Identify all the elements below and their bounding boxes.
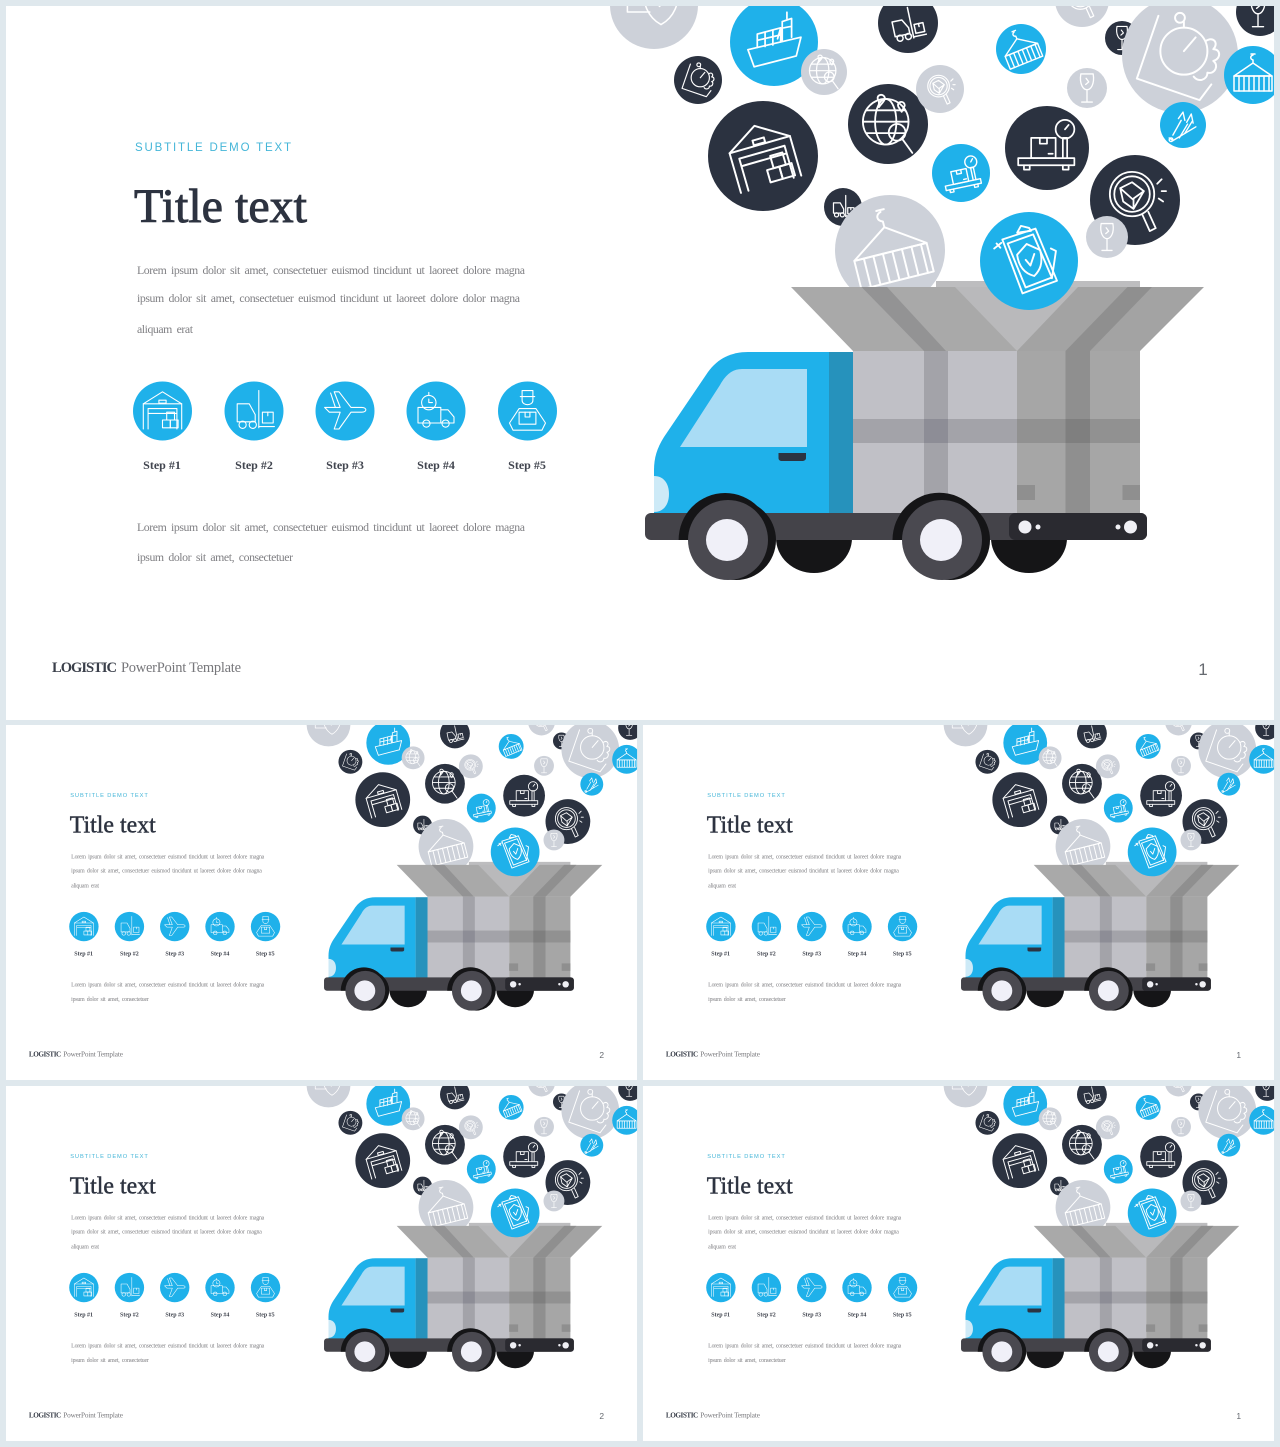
icon bubble: ship bbox=[730, 0, 818, 86]
slide 5 content: Step #4 bbox=[848, 1312, 866, 1318]
slide 2 content: Step #2 bbox=[120, 951, 139, 957]
slide 3 content: ipsum dolor sit amet, consectetuer bbox=[708, 997, 786, 1003]
slide 5 content: SUBTITLE DEMO TEXT bbox=[707, 1154, 785, 1160]
icon bubble: warehouse large bbox=[708, 101, 818, 211]
icon bubble: scale dark bbox=[1005, 106, 1089, 190]
icon bubble: container right bbox=[1224, 46, 1280, 104]
icon bubble: glass small grey bbox=[1086, 216, 1128, 258]
icon bubble: dark globe bbox=[848, 84, 928, 164]
slide 5 content: aliquam erat bbox=[708, 1245, 736, 1251]
slide 4 content: Step #3 bbox=[165, 1312, 184, 1318]
footer brand: PowerPoint Template bbox=[121, 660, 241, 676]
slide 5 content: Step #3 bbox=[802, 1312, 821, 1318]
cargo box front bbox=[853, 351, 1140, 515]
page number: 1 bbox=[1198, 660, 1208, 679]
slide 5 content: Lorem ipsum dolor sit amet, consectetuer euismod tincidunt ut laoreet dolore magna bbox=[708, 1343, 902, 1349]
slide 5 content: Step #5 bbox=[893, 1312, 912, 1318]
slide 5 content: ipsum dolor sit amet, consectetuer bbox=[708, 1358, 786, 1364]
slide 3 content: Step #5 bbox=[893, 951, 912, 957]
slide 3 content: Step #2 bbox=[757, 951, 776, 957]
icon: step 1 warehouse bbox=[133, 382, 192, 440]
slide 3 content: aliquam erat bbox=[708, 884, 736, 890]
chassis bbox=[645, 513, 1147, 540]
slide 5 content: ipsum dolor sit amet, consectetuer euismod tincidunt ut laoreet dolore dolor magna bbox=[708, 1229, 899, 1235]
slide 2 content: Lorem ipsum dolor sit amet, consectetuer euismod tincidunt ut laoreet dolore magna bbox=[71, 982, 265, 988]
slide 4 content: aliquam erat bbox=[71, 1245, 99, 1251]
slide 3 content: PowerPoint Template bbox=[700, 1050, 760, 1058]
slide 4 content: PowerPoint Template bbox=[63, 1411, 123, 1419]
slide 3 content: Lorem ipsum dolor sit amet, consectetuer euismod tincidunt ut laoreet dolore magna bbox=[708, 854, 902, 860]
slide 4 content: Step #4 bbox=[211, 1312, 229, 1318]
slide 4 content: Step #1 bbox=[74, 1312, 93, 1318]
front wheel bbox=[679, 493, 776, 580]
slide 4 content: Lorem ipsum dolor sit amet, consectetuer euismod tincidunt ut laoreet dolore magna bbox=[71, 1215, 265, 1221]
panel: slide 5 thumbnail bbox=[643, 1064, 1279, 1441]
slide 3 content bbox=[666, 703, 1279, 1060]
step labels bbox=[143, 458, 546, 472]
slide 2 content: aliquam erat bbox=[71, 884, 99, 890]
title: Title text bbox=[134, 180, 308, 233]
slide 5 content: Step #1 bbox=[711, 1312, 730, 1318]
slide 3 content: SUBTITLE DEMO TEXT bbox=[707, 793, 785, 799]
slide 5 content: 1 bbox=[1236, 1411, 1241, 1421]
step labels: Step #1 bbox=[143, 458, 181, 472]
icon: step 2 forklift bbox=[224, 382, 284, 440]
step labels: Step #3 bbox=[326, 458, 364, 472]
panel: main slide bbox=[6, 0, 1280, 720]
icon bubble: top right dark bbox=[1236, 0, 1280, 36]
slide 3 content: Step #3 bbox=[802, 951, 821, 957]
slide 5 content bbox=[666, 1064, 1279, 1421]
slide 4 content: LOGISTIC bbox=[29, 1411, 61, 1419]
slide 4 content: Lorem ipsum dolor sit amet, consectetuer euismod tincidunt ut laoreet dolore magna bbox=[71, 1343, 265, 1349]
subtitle: SUBTITLE DEMO TEXT bbox=[135, 142, 291, 154]
icon: step 3 plane bbox=[316, 382, 374, 440]
closing paragraph: Lorem ipsum dolor sit amet, consectetuer euismod tincidunt ut laoreet dolore magna bbox=[137, 520, 526, 534]
icon bubble: stopwatch large bbox=[1122, 0, 1238, 113]
icon bubble: clipboard shield bbox=[980, 212, 1078, 310]
footer brand bbox=[52, 660, 241, 676]
slide 3 content: Lorem ipsum dolor sit amet, consectetuer euismod tincidunt ut laoreet dolore magna bbox=[708, 982, 902, 988]
icon bubble: arrows bbox=[1160, 102, 1206, 148]
intro paragraph: Lorem ipsum dolor sit amet, consectetuer euismod tincidunt ut laoreet dolore magna bbox=[137, 263, 526, 277]
icon bubble: forklift bbox=[878, 0, 938, 53]
icon bubble: fist stopwatch bbox=[674, 56, 722, 104]
slide 2 content: Step #1 bbox=[74, 951, 93, 957]
icon bubble: container tilted bbox=[996, 24, 1046, 74]
slide 5 content: Lorem ipsum dolor sit amet, consectetuer euismod tincidunt ut laoreet dolore magna bbox=[708, 1215, 902, 1221]
slide 5 content: PowerPoint Template bbox=[700, 1411, 760, 1419]
slide 4 content: Title text bbox=[70, 1173, 156, 1199]
icon bubble: fragile glass dark bbox=[1105, 21, 1139, 55]
icon bubble: globe small bbox=[801, 49, 847, 95]
icon bubble: forklift small bbox=[824, 188, 862, 226]
footer brand: LOGISTIC bbox=[52, 660, 117, 676]
icon bubble: magnifier dark bbox=[1090, 155, 1180, 245]
slide 2 content: PowerPoint Template bbox=[63, 1050, 123, 1058]
slide 2 content: 2 bbox=[599, 1050, 604, 1060]
slide 4 content: SUBTITLE DEMO TEXT bbox=[70, 1154, 148, 1160]
slide 2 content bbox=[29, 703, 642, 1060]
slide 4 content: Step #2 bbox=[120, 1312, 139, 1318]
step labels: Step #5 bbox=[508, 458, 546, 472]
illustration: truck with icon bubbles bbox=[610, 0, 1280, 580]
intro paragraph: ipsum dolor sit amet, consectetuer euismod tincidunt ut laoreet dolore dolor magna bbox=[137, 291, 521, 305]
icon bubble: shield bbox=[610, 0, 698, 49]
slide 3 content: Title text bbox=[707, 812, 793, 838]
closing paragraph bbox=[137, 520, 526, 564]
step icons row bbox=[133, 382, 557, 440]
slide 2 content: ipsum dolor sit amet, consectetuer bbox=[71, 997, 149, 1003]
slide 2 content: Lorem ipsum dolor sit amet, consectetuer euismod tincidunt ut laoreet dolore magna bbox=[71, 854, 265, 860]
intro paragraph: aliquam erat bbox=[137, 322, 194, 336]
slide 2 content: Title text bbox=[70, 812, 156, 838]
slide 4 content: ipsum dolor sit amet, consectetuer euismod tincidunt ut laoreet dolore dolor magna bbox=[71, 1229, 262, 1235]
open box flaps bbox=[791, 281, 1204, 351]
slide 5 content: Title text bbox=[707, 1173, 793, 1199]
slide 3 content: LOGISTIC bbox=[666, 1050, 698, 1058]
panel: slide 3 thumbnail bbox=[643, 703, 1279, 1080]
slide 3 content: ipsum dolor sit amet, consectetuer euismod tincidunt ut laoreet dolore dolor magna bbox=[708, 868, 899, 874]
rear shadow wheels bbox=[776, 538, 1067, 573]
truck cab bbox=[654, 352, 853, 515]
slide 3 content: Step #4 bbox=[848, 951, 866, 957]
icon bubble: magnifier top bbox=[1055, 0, 1109, 27]
slide 4 content: Step #5 bbox=[256, 1312, 275, 1318]
slide 2 content: Step #4 bbox=[211, 951, 229, 957]
closing paragraph: ipsum dolor sit amet, consectetuer bbox=[137, 550, 293, 564]
rear wheel bbox=[892, 493, 990, 580]
icon bubble: pallet scale blue bbox=[932, 144, 990, 202]
panel: slide 4 thumbnail bbox=[6, 1064, 642, 1441]
icon bubble: magnifier grey bbox=[916, 65, 964, 113]
intro paragraph bbox=[137, 263, 526, 336]
slide 5 content: Step #2 bbox=[757, 1312, 776, 1318]
icon: step 4 delivery van bbox=[406, 382, 466, 440]
icon bubble: container large bbox=[835, 195, 945, 305]
icon bubble: fragile glass grey bbox=[1067, 68, 1107, 108]
icon: step 5 courier bbox=[498, 382, 557, 440]
slide 3 content: Step #1 bbox=[711, 951, 730, 957]
slide 4 content bbox=[29, 1064, 642, 1421]
slide 5 content: LOGISTIC bbox=[666, 1411, 698, 1419]
slide 2 content: ipsum dolor sit amet, consectetuer euismod tincidunt ut laoreet dolore dolor magna bbox=[71, 868, 262, 874]
slide 2 content: Step #3 bbox=[165, 951, 184, 957]
slide 2 content: SUBTITLE DEMO TEXT bbox=[70, 793, 148, 799]
panel: slide 2 thumbnail bbox=[6, 703, 642, 1080]
slide 3 content: 1 bbox=[1236, 1050, 1241, 1060]
slide 2 content: Step #5 bbox=[256, 951, 275, 957]
slide 4 content: 2 bbox=[599, 1411, 604, 1421]
slide 4 content: ipsum dolor sit amet, consectetuer bbox=[71, 1358, 149, 1364]
step labels: Step #2 bbox=[235, 458, 273, 472]
step labels: Step #4 bbox=[417, 458, 455, 472]
slide 2 content: LOGISTIC bbox=[29, 1050, 61, 1058]
